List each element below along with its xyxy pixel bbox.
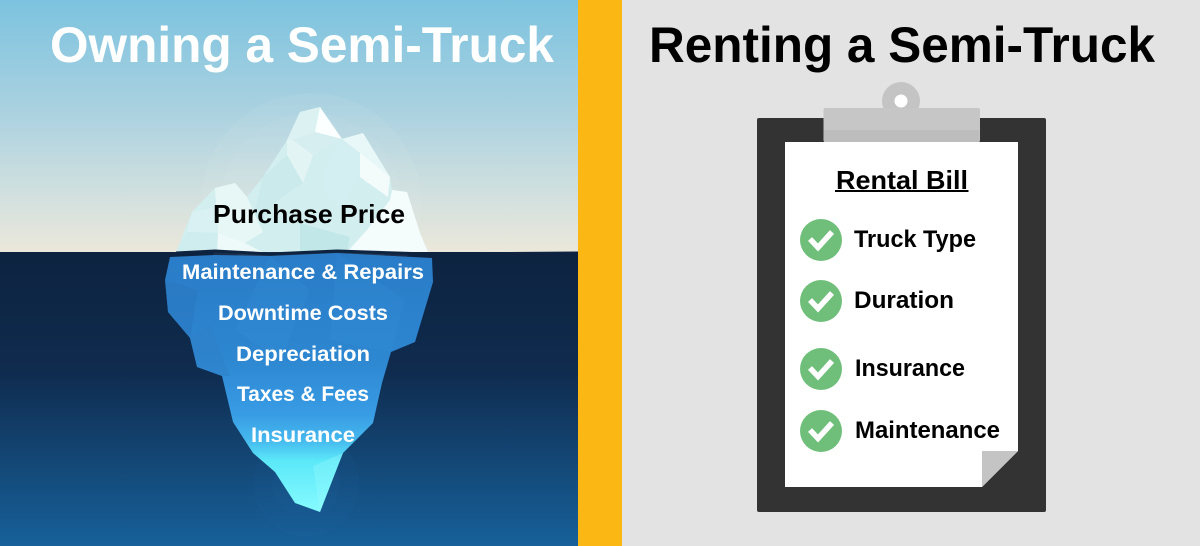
right background bbox=[622, 0, 1200, 546]
checklist item: truck type: Truck Type bbox=[854, 226, 976, 253]
label: downtime costs: Downtime Costs bbox=[218, 301, 388, 325]
heading: rental bill: Rental Bill bbox=[836, 165, 968, 195]
label: purchase price: Purchase Price bbox=[213, 199, 405, 229]
clipboard bbox=[757, 82, 1046, 512]
label: maintenance and repairs: Maintenance & Repairs bbox=[182, 260, 424, 284]
panel: owning a semi-truck bbox=[0, 0, 578, 546]
checklist item: maintenance: Maintenance bbox=[855, 417, 1000, 444]
label: depreciation: Depreciation bbox=[236, 342, 370, 366]
iceberg glow bbox=[201, 93, 421, 313]
panel: renting a semi-truck bbox=[622, 0, 1200, 546]
ocean background bbox=[0, 252, 578, 546]
checklist item: duration: Duration bbox=[854, 287, 954, 314]
checklist item: truck type bbox=[800, 219, 976, 261]
page fold bbox=[982, 451, 1018, 487]
checklist item: maintenance bbox=[800, 410, 1000, 452]
divider band bbox=[578, 0, 622, 546]
underwater glow bbox=[253, 431, 359, 537]
label: taxes and fees: Taxes & Fees bbox=[237, 382, 369, 406]
sky background bbox=[0, 0, 578, 254]
checklist item: duration bbox=[800, 280, 954, 322]
iceberg below water bbox=[165, 253, 433, 512]
clipboard board bbox=[757, 118, 1046, 512]
paper bbox=[785, 142, 1018, 487]
title: renting: Renting a Semi-Truck bbox=[649, 17, 1155, 73]
checklist item: insurance: Insurance bbox=[855, 355, 965, 382]
label: insurance: Insurance bbox=[251, 423, 355, 447]
checklist item: insurance bbox=[800, 348, 965, 390]
clip bbox=[824, 82, 980, 142]
waterline bbox=[176, 251, 578, 254]
title: owning: Owning a Semi-Truck bbox=[50, 17, 554, 73]
iceberg above water bbox=[176, 107, 428, 252]
